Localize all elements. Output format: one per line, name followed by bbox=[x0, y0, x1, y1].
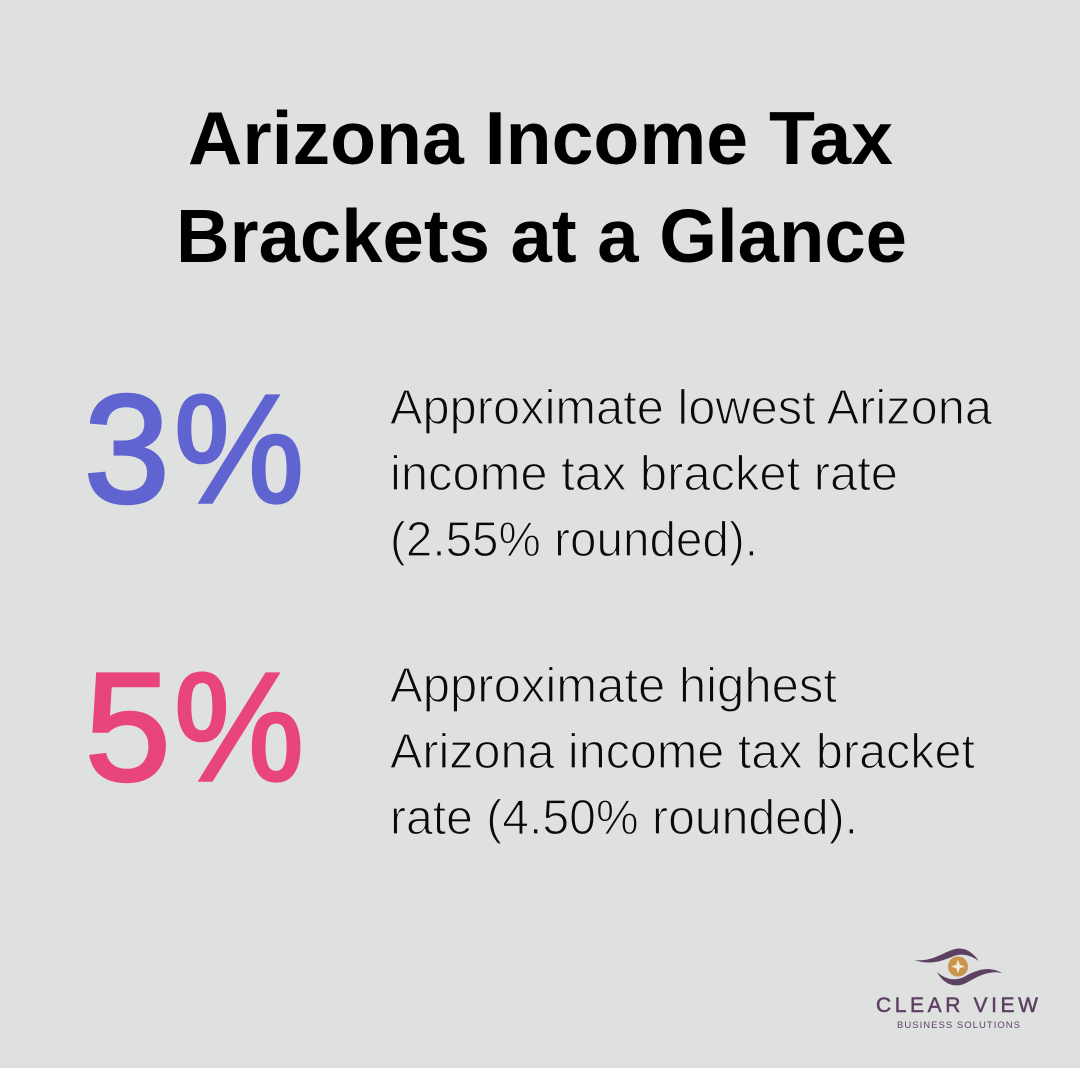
stat: 5% bbox=[85, 641, 304, 813]
description: highest bracket: rate (4.50% rounded). bbox=[390, 791, 858, 845]
stat: 3%: % bbox=[174, 363, 304, 535]
wordmark: CLEAR VIEW bbox=[876, 994, 1038, 1017]
title: Arizona Income Tax bbox=[188, 96, 893, 180]
description: highest bracket: Approximate highest bbox=[390, 659, 837, 713]
logo: Clear View Business Solutions bbox=[876, 948, 1038, 1031]
icon: gold iris with star bbox=[948, 956, 968, 976]
stat: 3%: 3 bbox=[84, 363, 170, 535]
title bbox=[176, 96, 907, 278]
stat: 5%: 5 bbox=[85, 641, 171, 813]
title: Brackets at a Glance bbox=[176, 194, 907, 278]
description: lowest bracket: Approximate lowest Arizona bbox=[390, 381, 993, 435]
description: lowest bracket bbox=[390, 381, 993, 567]
icon: eye lower lid bbox=[937, 969, 1002, 985]
description: lowest bracket: (2.55% rounded). bbox=[390, 513, 758, 567]
icon: eye upper lid bbox=[914, 948, 979, 963]
stat: 5%: % bbox=[174, 641, 304, 813]
description: lowest bracket: income tax bracket rate bbox=[390, 447, 898, 501]
description: highest bracket: Arizona income tax bracket bbox=[390, 725, 975, 779]
tagline: BUSINESS SOLUTIONS bbox=[897, 1020, 1020, 1031]
description: highest bracket bbox=[390, 659, 975, 845]
stat: 3% bbox=[84, 363, 304, 535]
